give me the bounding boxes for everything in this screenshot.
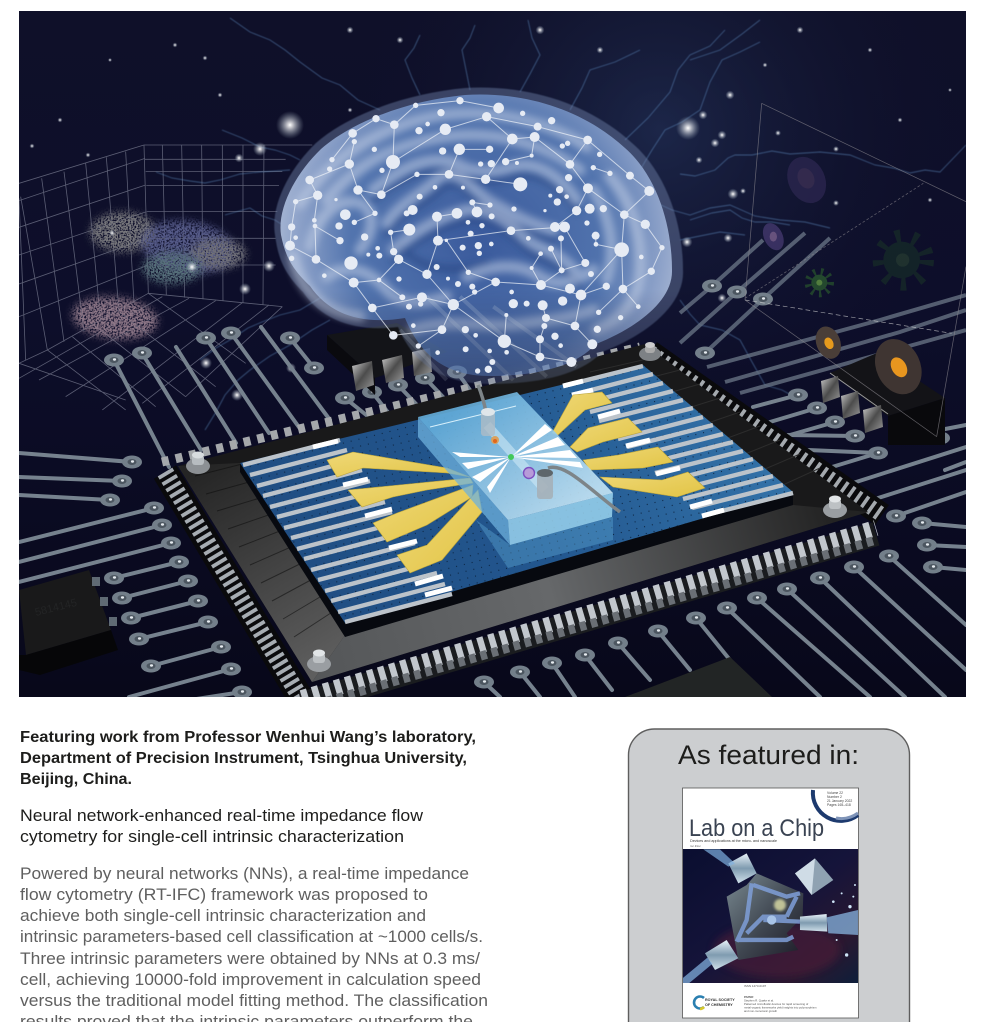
component: lower middle dark IC (625, 657, 772, 697)
octahedral crystal (795, 858, 833, 895)
panel: as featured in (628, 729, 910, 1022)
heading: featuring work: Beijing, China. (20, 771, 132, 788)
cover paper reference: Patterned microfluidic devices for rapid screening of (744, 1002, 808, 1006)
cover publisher logo: OF CHEMISTRY (705, 1003, 733, 1007)
brain body (280, 95, 672, 376)
hexagonal crystal (727, 873, 803, 960)
blue microchannels (737, 883, 800, 942)
cover ISSN: ISSN 1473-0197 (744, 984, 767, 988)
green sensing spark (508, 454, 514, 460)
white strip ends (313, 381, 724, 595)
purple cell (524, 468, 534, 478)
circuit traces (19, 233, 966, 700)
component: upper left IC with legs (327, 323, 432, 395)
3D scatter plot grid with cell clusters (19, 145, 312, 410)
cover issue details: Volume 22 (827, 791, 843, 795)
heading: featuring work: Department of Precision Instrument, Tsinghua University, (20, 750, 467, 767)
cover paper reference (744, 995, 817, 1013)
abstract body text: cell, achieving 10000-fold improvement in calculation speed (20, 971, 481, 989)
heading: featuring work: Featuring work from Professor Wenhui Wang’s laboratory, (20, 729, 476, 746)
cover subtitle: Devices and applications at the micro- and nanoscale (690, 838, 777, 843)
cover paper reference: Stephen R. Quake et al. (744, 998, 774, 1002)
cover issue details: 21 January 2022 (827, 799, 852, 803)
outlet connector (537, 469, 553, 499)
icon: green cell small (809, 272, 830, 293)
cover paper reference: metal-organic frameworks yield insights into polymorphism (744, 1006, 817, 1010)
neural network brain (274, 88, 683, 384)
abstract body text: Three intrinsic parameters were obtained by NNs at 0.3 ms/ (20, 950, 480, 968)
article title (20, 807, 423, 846)
processor package with pins (162, 344, 882, 708)
component: left dark IC (19, 570, 118, 675)
cover artwork (683, 849, 858, 983)
panel heading: As featured in: (678, 740, 859, 770)
journal cover thumbnail (682, 788, 858, 1018)
lightning arcs (156, 18, 966, 430)
cover issue details: Number 2 (827, 795, 842, 799)
abstract body text: achieve both single-cell intrinsic characterization and (20, 907, 426, 925)
brain halo (274, 88, 683, 384)
traces seen through brain (400, 297, 577, 380)
tubing (478, 385, 620, 512)
orange cell (491, 436, 499, 444)
icon: purple cell small (763, 223, 784, 250)
abstract body text: intrinsic parameters-based cell classification at ~1000 cells/s. (20, 928, 483, 946)
article title: Neural network-enhanced real-time impedance flow (20, 807, 423, 825)
right measurement frame with cell images (745, 103, 966, 437)
cover publisher logo: ROYAL SOCIETY (705, 998, 735, 1002)
cover illustration: brain over microfluidic chip (19, 11, 966, 708)
left electrode strips (243, 440, 452, 622)
microchannel (487, 425, 545, 490)
icon: green cell large (880, 237, 927, 283)
brain gyri (293, 113, 641, 380)
abstract body text (20, 865, 488, 1022)
article title: cytometry for single-cell intrinsic characterization (20, 828, 404, 846)
package bolts (186, 342, 847, 672)
cover paper reference: PAPER (744, 995, 753, 999)
cover issue details (827, 791, 852, 807)
right electrode strips (563, 366, 793, 516)
water jets (703, 849, 735, 867)
neural network nodes and links (285, 97, 665, 374)
cover publisher logo (694, 997, 735, 1009)
icon: orange cell large (875, 339, 922, 394)
steel tubes (728, 853, 757, 883)
cover ring badge (813, 790, 858, 821)
component: right IC with legs (821, 353, 945, 445)
electrode fan (452, 424, 583, 493)
abstract body text: Powered by neural networks (NNs), a real-time impedance (20, 865, 469, 883)
icon: orange cell small (816, 326, 841, 359)
chip substrate (240, 365, 793, 637)
cover issue details: Pages 165–418 (827, 803, 851, 807)
icon: purple cell large (787, 157, 826, 203)
PDMS glass block with microchannel (418, 385, 620, 568)
component: left dark IC: 5814145 (34, 597, 78, 619)
cover masthead: Lab on a Chip (689, 815, 824, 842)
cover web address: rsc.li/loc (690, 844, 701, 848)
abstract body text: flow cytometry (RT-IFC) framework was proposed to (20, 886, 428, 904)
heading: featuring work (20, 729, 476, 788)
abstract body text: versus the traditional model fitting method. The classification (20, 992, 488, 1010)
gold electrode pads (327, 392, 705, 573)
cover paper reference: and non-monotonic growth (744, 1009, 778, 1013)
stars (30, 26, 952, 401)
inlet connector (481, 408, 495, 436)
